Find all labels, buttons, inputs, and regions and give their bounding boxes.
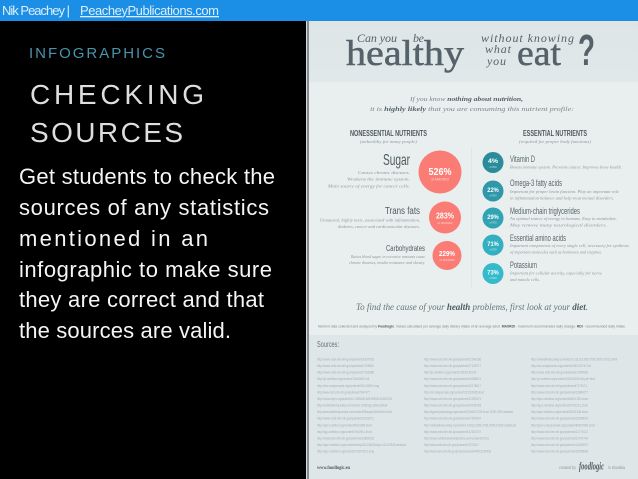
essential amino acids row: Essential amino acids <box>510 233 566 243</box>
sources column 1: http://www.ncbi.nlm.nih.gov/pubmed/2703816 <box>317 364 374 368</box>
omega-3 row: of RDI <box>489 194 497 198</box>
intro text: it is highly likely that you are consuming this nutrient profile: <box>370 106 574 113</box>
sources column 3: http://ajcn.nutrition.org/content/95/2/1136.short <box>531 410 588 414</box>
credit footer: created by <box>559 465 577 470</box>
sources column 1: http://www.ncbi.nlm.nih.gov/pubmed/2518711 <box>317 417 374 421</box>
panel: sources <box>309 335 638 479</box>
carbohydrates text <box>349 244 425 266</box>
omega-3 row: in inflammation balance and help treat mental disorders. <box>510 196 614 200</box>
panel: essential nutrients <box>482 129 629 284</box>
trans fats text <box>320 205 420 230</box>
sources column 2: http://www.ncbi.nlm.nih.gov/pubmed/12623707 <box>424 430 481 434</box>
vitamin D row: Boosts immune system. Prevents cancer. Improves bone health. <box>510 164 622 170</box>
trans fats text: Unnatural, highly toxic, associated with inflammation, <box>320 218 420 224</box>
medium-chain triglycerides row: Medium-chain triglycerides <box>510 206 580 216</box>
panel: nonessential nutrients <box>320 129 462 270</box>
panel: infographic <box>306 21 638 479</box>
sources column 2: http://onlinelibrary.wiley.com/doi/10.1002/j.1365-2796.2005.01529.x/abstract <box>424 423 516 427</box>
medium-chain triglycerides row: 29% <box>487 214 499 221</box>
sugar text: Sugar <box>383 152 410 169</box>
essential amino acids row: of RDI <box>489 248 497 252</box>
sources column 1: http://www.ncbi.nlm.nih.gov/pubmed/1837953 <box>317 358 374 362</box>
essential amino acids row: Important components of every single cell, necessary for synthesis <box>509 243 629 249</box>
sources column 2: http://www.nutritionandmetabolism.com/content/2/1/31 <box>424 436 489 440</box>
essential amino acids row: 71% <box>487 241 499 248</box>
sources column 2: http://www.ncbi.nlm.nih.gov/pubmed/17972617 <box>424 443 479 447</box>
potassium row: Important for cellular activity, especially for nerve <box>509 270 602 276</box>
top attribution bar: Nik Peachey | <box>2 3 70 18</box>
sources column 3: http://circ.ahajournals.org/content/106/21/2747.full <box>531 364 591 368</box>
sources column 3: http://www.ncbi.nlm.nih.gov/pubmed/13864277 <box>531 390 588 394</box>
sources column 3: http://www.ncbi.nlm.nih.gov/pubmed/7175171 <box>531 384 587 388</box>
sources column 3: http://www.ncbi.nlm.nih.gov/pubmed/21776172 <box>531 430 588 434</box>
infographic title: healthy <box>346 33 464 73</box>
sources column 3: http://jn.nutrition.org/content/132/3/329S.full.pdf+html <box>531 377 595 381</box>
infographic title: eat <box>517 33 561 73</box>
section label: INFOGRAPHICS <box>29 45 165 62</box>
carbohydrates circle 229%: of MAXRDI <box>439 258 455 262</box>
conclusion sentence: To find the cause of your health problems, first look at your diet. <box>356 302 588 312</box>
sugar text <box>327 152 410 188</box>
vitamin D row: Vitamin D <box>510 154 535 164</box>
potassium row: Potassium <box>510 260 537 270</box>
top attribution bar <box>0 0 638 21</box>
sources column 3: http://www.ncbi.nlm.nih.gov/pubmed/15208033 <box>531 417 588 421</box>
vitamin D row: of RDI <box>489 165 497 169</box>
sources column 3: http://onlinelibrary.wiley.com/doi/10.1111/j.1365-2796.2002.01012.x/full <box>531 358 617 362</box>
sources column 2: http://www.ncbi.nlm.nih.gov/pubmed/21993374 <box>424 397 481 401</box>
potassium row: of RDI <box>489 276 497 280</box>
slide title: SOURCES <box>30 117 183 148</box>
sources column 1: http://circ.ahajournals.org/content/91/1/2590.long <box>317 384 379 388</box>
sugar text: Main source of energy for cancer cells. <box>327 184 410 188</box>
sources column 2: http://ajpcell.physiology.org/content/293/6/C1765.short 2009 1999 abstract <box>424 410 513 414</box>
column divider <box>471 148 472 288</box>
medium-chain triglycerides row: May remove many neurological disorders. <box>509 222 607 228</box>
body text <box>19 164 275 343</box>
body text: the sources are valid. <box>19 318 231 343</box>
intro text <box>370 96 574 113</box>
carbohydrates circle 229%: 229% <box>439 249 455 258</box>
carbohydrates text: Raises blood sugar, in excessive amounts cause <box>350 254 425 260</box>
sources column 3: http://jcem.endojournals.org/content/89/6/2596.short <box>531 423 595 427</box>
sources column 3: http://www.ncbi.nlm.nih.gov/pubmed/13459972 <box>531 443 588 447</box>
sources column 1: http://jn.nutrition.org/content/135/3/562.full <box>317 377 369 381</box>
body text: sources of any statistics <box>19 195 269 220</box>
potassium row: 73% <box>487 270 499 276</box>
essential amino acids row: of important molecules such as hormones and enzymes. <box>510 250 602 254</box>
infographic title: without knowing <box>481 31 574 45</box>
medium-chain triglycerides row: An optimal source of energy to humans. Easy to metabolize. <box>509 216 617 221</box>
potassium row: and muscle cells. <box>510 277 540 282</box>
credit footer: foodlogic <box>579 462 604 472</box>
website footer: www.foodlogic.eu <box>317 465 350 471</box>
sugar circle 526%: 526% <box>428 166 452 178</box>
trans fats circle 283%: of MAXRDI <box>437 221 453 225</box>
nonessential heading: NONESSENTIAL NUTRIENTS <box>350 129 427 138</box>
trans fats text: diabetes, cancer and cardiovascular diseases. <box>338 224 420 230</box>
sources column 2: http://www.ncbi.nlm.nih.gov/probes/sviewer/PMC2225439 <box>424 450 491 454</box>
sources column 3: http://ajcn.nutrition.org/content/65/1/135.short <box>531 397 588 401</box>
vitamin D row: 4% <box>488 158 498 165</box>
credit footer: in Slovakia <box>608 465 625 470</box>
sources column 3: http://www.ncbi.nlm.nih.gov/pubmed/20038538 <box>531 450 588 454</box>
body text: infographic to make sure <box>19 257 272 282</box>
sources heading: Sources: <box>317 340 339 349</box>
infographic title: ? <box>578 26 595 75</box>
sources column 1: http://www.ncbi.nlm.nih.gov/pubmed/7847477 <box>317 390 370 394</box>
intro text: If you know nothing about nutrition, <box>409 96 523 103</box>
medium-chain triglycerides row <box>482 206 617 228</box>
sources column 1: http://ajcn.nutrition.org/content/72/3/705.2.long <box>317 450 374 454</box>
sources column 2: http://www.ncbi.nlm.nih.gov/pubmed/16388574 <box>424 377 481 381</box>
sugar text: Weakens the immune system. <box>347 176 410 182</box>
sources column 3: http://www.ncbi.nlm.nih.gov/pubmed/7364583 <box>531 371 588 375</box>
slide title <box>30 79 204 148</box>
trans fats circle 283%: 283% <box>436 212 454 220</box>
credit footer <box>559 462 625 472</box>
sources column 2: http://www.ncbi.nlm.nih.gov/pubmed/22178617 <box>424 384 481 388</box>
essential amino acids row <box>482 233 629 256</box>
sugar text: Causes chronic diseases. <box>358 170 410 175</box>
nonessential subtitle: (unhealthy for many people) <box>360 139 418 144</box>
body text: Get students to check the <box>19 164 275 189</box>
infographic title <box>346 26 595 75</box>
medium-chain triglycerides row: of RDI <box>489 220 497 224</box>
sugar circle 526%: of MAXRDI <box>431 178 449 182</box>
sources column 2 <box>424 358 516 454</box>
potassium row <box>482 260 602 284</box>
sources column 1: http://ajcn.nutrition.org/content/84/2/289.short <box>317 423 372 427</box>
sources column 2: http://www.ncbi.nlm.nih.gov/pubmed/12549136 <box>424 358 481 362</box>
sources column 1: http://www.ncbi.nlm.nih.gov/pubmed/7332686 <box>317 371 374 375</box>
infographic title: Can you <box>357 31 397 45</box>
infographic title: you <box>486 54 506 68</box>
trans fats circle 283% <box>429 202 461 234</box>
trans fats text: Trans fats <box>385 205 420 217</box>
body text: they are correct and that <box>19 287 264 312</box>
sources column 2: http://www.ncbi.nlm.nih.gov/pubmed/17225717 <box>424 364 481 368</box>
sources column 1: http://ajp.nutrition.org/content/76/3/911.short <box>317 430 372 434</box>
sources column 2: http://circ.ahajournals.org/content/117/23/2965.short <box>424 390 484 394</box>
sources column 1 <box>317 358 406 454</box>
infographic title: be <box>413 31 425 45</box>
sources column 3: http://ajcn.nutrition.org/content/75/2/221.short <box>531 404 588 408</box>
carbohydrates text: Carbohydrates <box>386 244 425 253</box>
sources column 1: http://www.nejm.org/doi/full/10.1056/NEJM199804232380702 <box>317 397 392 401</box>
sources column 2: http://jn.nutrition.org/content/135/3/130.full <box>424 371 476 375</box>
slide title: CHECKING <box>30 79 204 110</box>
sources column 3 <box>531 358 617 454</box>
sources column 3: http://www.ncbi.nlm.nih.gov/pubmed/21474704 <box>531 436 588 440</box>
essential heading: ESSENTIAL NUTRIENTS <box>523 129 587 138</box>
essential subtitle: (required for proper body functions) <box>519 139 592 144</box>
infographic header band <box>309 21 638 82</box>
carbohydrates text: chronic diseases, insulin resistance and obesity. <box>349 260 425 266</box>
top attribution bar: PeacheyPublications.com <box>80 3 219 18</box>
sources column 1: http://onlinelibrary.wiley.com/doi/10.1002/dpj.2893.ab/full <box>317 404 387 408</box>
data note: Nutrient data collected and analyzed by Foodlogic. Values calculated per average daily dietary intake of an average adult. MAXRDI - maximum recommended daily dosage. RDI - recommended daily intake. <box>318 324 626 328</box>
omega-3 row: Important for proper brain function. Play an important role <box>509 189 619 194</box>
sources column 1: http://www.ncbi.nlm.nih.gov/pubmed/13899163 <box>317 436 374 440</box>
omega-3 row: 22% <box>487 187 499 194</box>
sources column 2: http://www.ncbi.nlm.nih.gov/pubmed/17502407 <box>424 417 481 421</box>
sources column 2: http://www.ncbi.nlm.nih.gov/pubmed/20196728 <box>424 404 481 408</box>
sources column 1: http://ajcn.nutrition.org/content/early/2012/06/20/ajcn.112.03943.abstract <box>317 443 406 447</box>
vitamin D row <box>482 152 622 173</box>
sources column 1: http://www.diabetesjournals.com/content/28/suppl/260/fullText.html <box>317 410 392 414</box>
carbohydrates circle 229% <box>432 241 462 270</box>
infographic title: what <box>485 42 512 56</box>
sugar circle 526% <box>418 150 462 194</box>
omega-3 row: Omega-3 fatty acids <box>510 178 562 188</box>
body text: mentioned in an <box>19 226 208 251</box>
omega-3 row <box>482 178 619 202</box>
